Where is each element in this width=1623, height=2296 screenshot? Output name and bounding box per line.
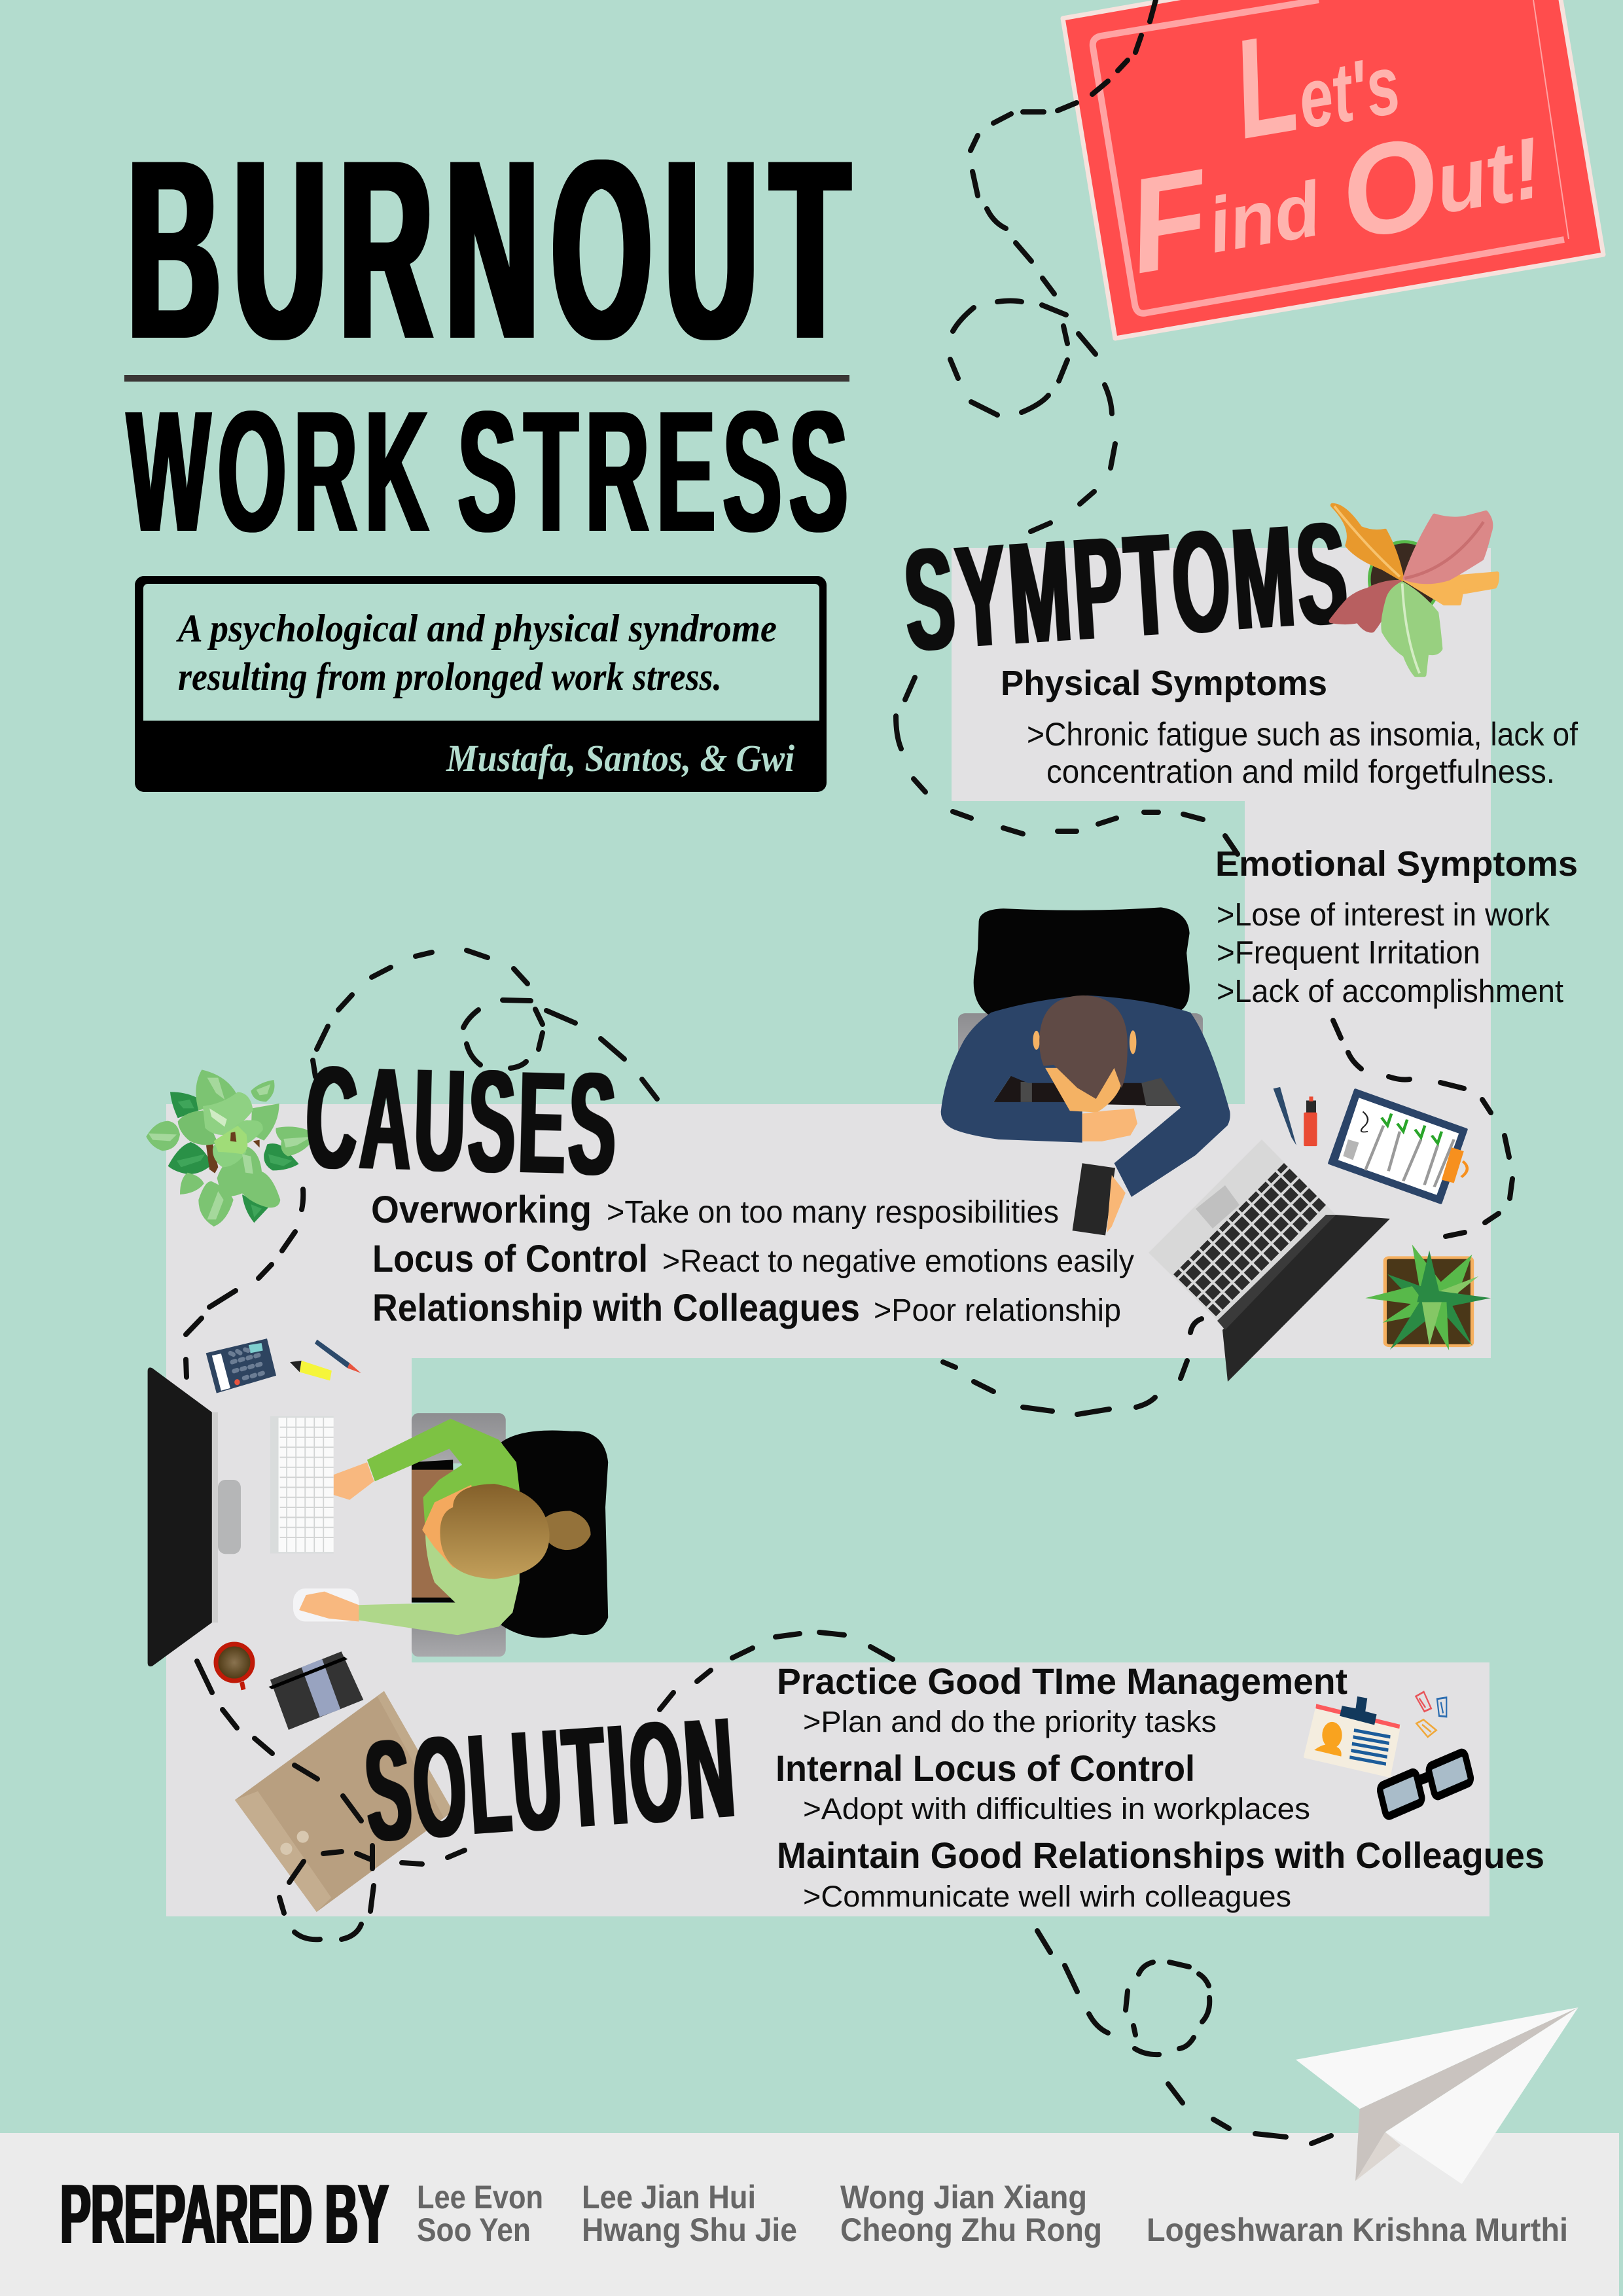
- sign text: Find: F: [1117, 141, 1223, 302]
- footer: team names: Hwang Shu Jie: [582, 2212, 797, 2248]
- text: solution list: >Plan and do the priority tasks: [803, 1705, 1217, 1738]
- footer: prepared by: PREPARED BY: [60, 2167, 389, 2261]
- sign text: Let's: Let's: [1222, 0, 1408, 168]
- text: causes list: Relationship with Colleagues: [372, 1287, 860, 1329]
- text: causes list: [371, 1189, 1134, 1329]
- text: solution list: Practice Good TIme Management: [777, 1660, 1347, 1702]
- icon: brown envelope: [235, 1691, 453, 1912]
- icon: glasses: [1379, 1751, 1472, 1817]
- icon: paperclips: [1416, 1692, 1446, 1737]
- footer band: [0, 2133, 1619, 2296]
- text: emotional symptoms: >Frequent Irritation: [1217, 935, 1480, 971]
- icon: man at desk, top view: [941, 907, 1467, 1236]
- text: solution list: [776, 1660, 1544, 1913]
- text: solution list: >Adopt with difficulties in workplaces: [803, 1792, 1310, 1825]
- text: emotional symptoms: Emotional Symptoms: [1215, 844, 1578, 884]
- text: SOLUTION: [361, 1688, 742, 1872]
- icon: coffee mug: [216, 1644, 253, 1690]
- icon: paper plane: [1296, 2007, 1578, 2184]
- icon: pen: [1274, 1087, 1296, 1145]
- text: physical symptoms: [1001, 664, 1578, 790]
- footer: team names: Soo Yen: [417, 2212, 531, 2248]
- dashed flight path: [186, 0, 1512, 2144]
- icon: keyboard: [270, 1416, 334, 1553]
- icon: autumn leaf plant: [1331, 505, 1497, 675]
- text: causes list: >Take on too many resposibilities: [607, 1195, 1059, 1230]
- text: emotional symptoms: [1215, 844, 1578, 1009]
- panel: connected grey desk path: [166, 548, 1491, 1916]
- text: emotional symptoms: >Lose of interest in work: [1217, 897, 1550, 933]
- text: solution list: Internal Locus of Control: [776, 1748, 1195, 1789]
- red sign: Let's Find Out: [1063, 0, 1603, 338]
- icon: monitor: [148, 1367, 241, 1666]
- footer: team names: Wong Jian Xiang: [840, 2179, 1087, 2215]
- footer: team names: Logeshwaran Krishna Murthi: [1147, 2212, 1568, 2248]
- text: solution list: Maintain Good Relationships with Colleagues: [777, 1835, 1544, 1876]
- icon: leafy plant: [146, 1069, 316, 1227]
- sign text: Find: ind: [1202, 166, 1328, 270]
- text: causes list: Overworking: [371, 1189, 592, 1231]
- text: physical symptoms: Physical Symptoms: [1001, 664, 1327, 703]
- text: physical symptoms: concentration and mild forgetfulness.: [1046, 753, 1555, 790]
- subtitle: WORK STRESS: WORK STRESS: [127, 375, 855, 567]
- footer: team names: [417, 2179, 1568, 2248]
- text: causes list: >React to negative emotions easily: [662, 1244, 1134, 1279]
- text: physical symptoms: >Chronic fatigue such as insomia, lack of: [1027, 716, 1578, 753]
- icon: fountain pen: [315, 1340, 361, 1373]
- text: causes list: Locus of Control: [372, 1238, 648, 1280]
- title divider: [124, 375, 849, 382]
- text: solution list: >Communicate well wirh colleagues: [803, 1880, 1291, 1913]
- icon: black wallet with strap: [270, 1651, 363, 1730]
- icon: marker: [1304, 1096, 1317, 1146]
- sign text: Out!: O: [1330, 109, 1452, 266]
- title: BURNOUT: BURNOUT: [128, 107, 863, 392]
- icon: clipboard: [1329, 1090, 1467, 1203]
- footer: team names: Cheong Zhu Rong: [840, 2212, 1102, 2248]
- sign text: Out!: ut!: [1428, 119, 1548, 232]
- definition text line 1: A psychological and physical syndrome: [175, 607, 777, 650]
- icon: calculator: [206, 1338, 276, 1393]
- citation: Mustafa, Santos, & Gwi: [446, 737, 794, 780]
- icon: highlighter: [290, 1361, 332, 1380]
- text: causes list: >Poor relationship: [874, 1293, 1121, 1328]
- text: emotional symptoms: >Lack of accomplishment: [1217, 974, 1563, 1009]
- footer: team names: Lee Evon: [417, 2179, 543, 2215]
- definition text line 2: resulting from prolonged work stress.: [178, 655, 722, 698]
- icon: laptop: [1149, 1139, 1390, 1382]
- text: CAUSES: [304, 1036, 621, 1206]
- icon: id card: [1305, 1696, 1400, 1776]
- icon: woman at desk, top view: [148, 1338, 608, 1666]
- icon: potted plant, top view: [1365, 1244, 1491, 1350]
- definition box: [135, 576, 827, 792]
- footer: team names: Lee Jian Hui: [582, 2179, 756, 2215]
